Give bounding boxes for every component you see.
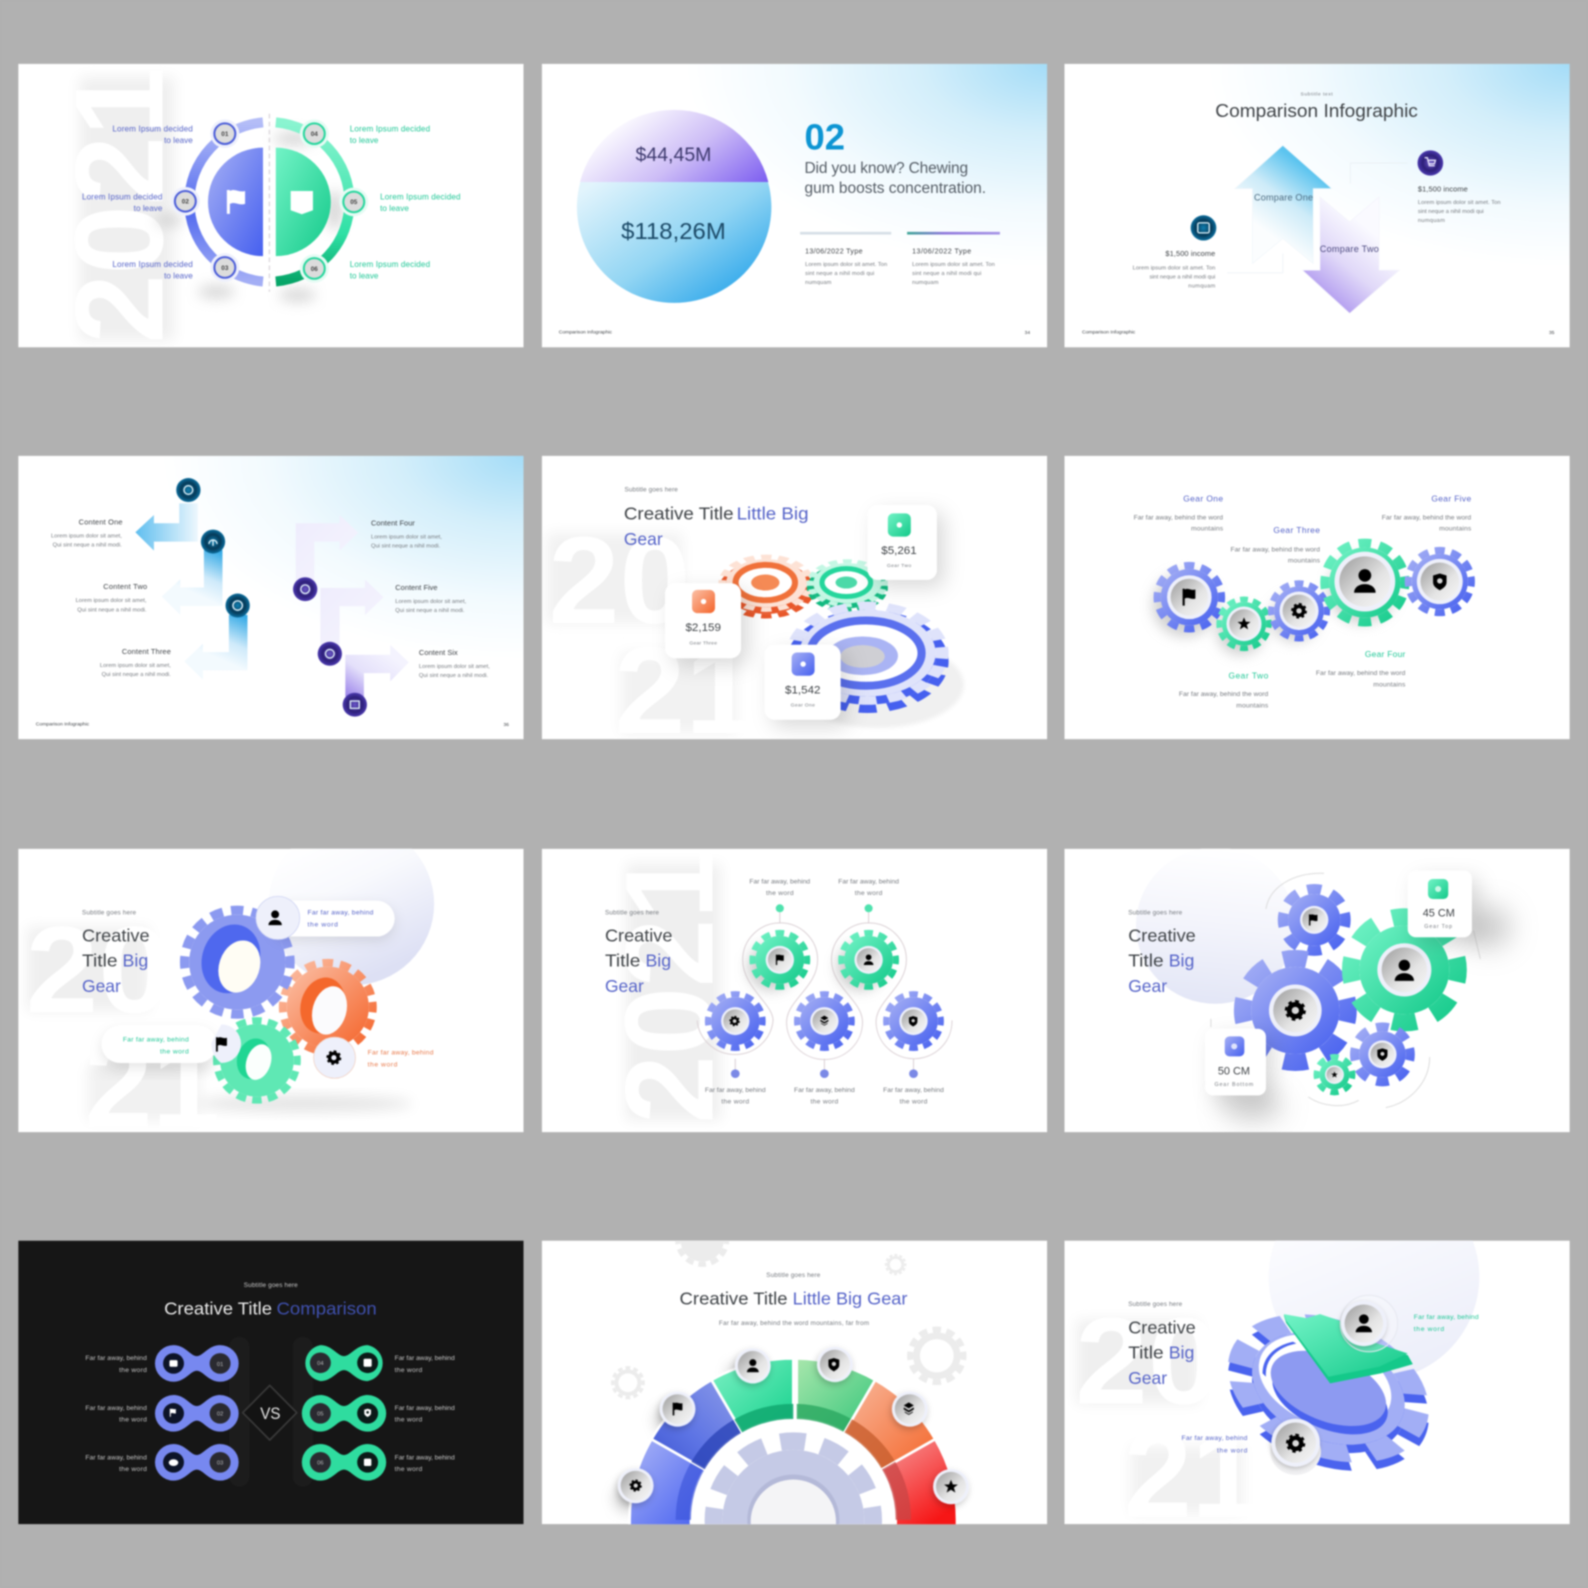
content labels left: Qui sint neque a nihil modi.	[77, 608, 147, 613]
chart: split circle: $44,45M	[636, 144, 711, 166]
gear captions: the word	[766, 890, 794, 897]
callout: blue: the word	[308, 922, 338, 929]
background year numerals: 21	[1124, 1406, 1259, 1543]
callout: green: the word	[160, 1048, 189, 1055]
node labels left: to leave	[134, 204, 163, 213]
detail column right: Lorem ipsum dolor sit amet. Ton	[912, 262, 995, 268]
panel: slide 8 five connected gears	[541, 848, 1048, 1133]
blue chain links: 02	[217, 1412, 223, 1418]
heading: Subtitle goes here	[82, 910, 137, 917]
decorative pale gears	[613, 1216, 964, 1398]
callout text: blue	[1182, 1435, 1248, 1454]
gear labels: Far far away, behind the word	[1134, 514, 1223, 521]
background year numerals: 2021	[601, 851, 739, 1124]
background year numerals	[547, 513, 756, 760]
labels left: the word	[119, 1466, 147, 1473]
card: gear two value: $5,261	[881, 545, 917, 557]
detail column right: 13/06/2022 Type	[912, 249, 971, 256]
gear labels: Gear Four	[1365, 649, 1406, 659]
soft shadows	[156, 132, 343, 302]
gear captions: Far far away, behind	[794, 1087, 855, 1094]
content labels right: Qui sint neque a nihil modi.	[419, 673, 489, 679]
gear: flag	[752, 933, 807, 987]
gear labels: mountains	[1191, 526, 1224, 533]
semicircle segments	[630, 1358, 957, 1588]
text block: income left: sint neque a nihil modi qui	[1149, 275, 1215, 280]
node labels right	[350, 124, 460, 280]
gear captions: the word	[855, 890, 883, 897]
gear: cog	[708, 994, 763, 1048]
heading	[82, 910, 150, 996]
content labels left: Content One	[79, 517, 123, 526]
blue chain links: 03	[217, 1461, 223, 1467]
gear: shield	[886, 994, 941, 1048]
detail column left	[805, 249, 887, 286]
heading: Creative	[82, 926, 150, 946]
node labels right: Lorem Ipsum decided	[350, 124, 430, 133]
footer: Comparison Infographic	[559, 329, 613, 335]
gear one	[1157, 565, 1222, 629]
heading: Gear	[82, 976, 121, 996]
text block: income left: numquam	[1188, 283, 1216, 289]
arrow: content six	[345, 645, 409, 696]
gear: large green user	[1351, 917, 1458, 1023]
panel: slide 6 chain of gears	[1064, 455, 1570, 740]
heading: Gear	[1128, 1368, 1167, 1388]
lavender circle	[1269, 1173, 1479, 1381]
card: gear one value	[765, 645, 841, 720]
callout text: blue: the word	[1217, 1447, 1248, 1454]
panel: slide 3 comparison arrows	[1064, 63, 1570, 348]
footer	[559, 329, 1030, 336]
content labels left: Qui sint neque a nihil modi.	[102, 672, 171, 678]
gear captions: the word	[900, 1099, 928, 1106]
content labels left: Qui sint neque a nihil modi.	[53, 542, 122, 548]
labels right	[395, 1355, 455, 1473]
panel: slide 5 isometric gears	[541, 455, 1048, 760]
heading: Gear	[605, 976, 644, 996]
gear: small blue flag	[1283, 889, 1346, 951]
callout: green: Far far away, behind	[123, 1036, 189, 1043]
center dashed divider	[267, 114, 271, 292]
heading: Subtitle goes here	[625, 487, 678, 494]
heading text: gum boosts concentration.	[804, 180, 986, 197]
arrow: content five	[320, 580, 383, 644]
icon: flag	[227, 190, 245, 214]
content labels right: Lorem ipsum dolor sit amet,	[371, 534, 442, 540]
icon buttons	[618, 1347, 969, 1504]
gear: blue isometric with shadow	[792, 606, 964, 728]
gear labels	[1134, 493, 1472, 710]
text block: income right: $1,500 income	[1418, 185, 1468, 194]
green chain links: 04	[317, 1361, 324, 1367]
panel: slide 11 gear semicircle	[541, 1240, 1048, 1526]
background year numerals: 21	[85, 1017, 220, 1154]
numbered nodes: 05	[350, 199, 358, 206]
heading: Title	[1128, 1343, 1164, 1362]
node labels left	[82, 124, 193, 280]
callout: green	[102, 1024, 241, 1063]
icon button: user	[1340, 1295, 1398, 1352]
footer: 36	[503, 722, 509, 728]
gear: orange	[283, 963, 373, 1052]
segment: red	[882, 1439, 957, 1527]
node labels left: Lorem Ipsum decided	[112, 260, 193, 269]
green chain links: 06	[317, 1461, 324, 1467]
heading	[605, 910, 672, 996]
heading: Far far away, behind the word mountains, far from	[719, 1320, 869, 1327]
detail column right	[912, 249, 995, 286]
gear three	[1271, 583, 1327, 638]
card: 50 cm: Gear Bottom	[1214, 1082, 1254, 1088]
icon: purple cart badge	[1418, 150, 1443, 176]
detail column left: Lorem ipsum dolor sit amet. Ton	[805, 262, 887, 268]
labels right: the word	[395, 1466, 423, 1473]
node labels right: Lorem Ipsum decided	[350, 260, 430, 269]
icon: dark blue badge	[1191, 215, 1216, 241]
gear: blue shield	[1355, 1027, 1410, 1082]
card: 45 cm: Gear Top	[1424, 924, 1452, 930]
heading: Little Big	[737, 503, 809, 523]
soft shadows	[1153, 557, 1396, 655]
footer: Comparison Infographic	[36, 721, 90, 727]
segment: dark blue	[651, 1380, 742, 1469]
arrow: content two	[162, 550, 222, 615]
content labels right: Content Six	[419, 648, 458, 657]
text block: income left	[1133, 249, 1216, 289]
card: 45 cm: 45 CM	[1423, 908, 1455, 920]
text block: income left: $1,500 income	[1165, 249, 1215, 258]
background year numerals	[26, 902, 412, 1154]
gear captions: Far far away, behind	[749, 878, 810, 885]
heading: Comparison	[276, 1299, 377, 1318]
segment: light green	[797, 1358, 875, 1432]
detail column left: numquam	[805, 280, 832, 286]
motion arcs	[1211, 873, 1480, 1108]
card: gear three value: Gear Three	[689, 640, 717, 646]
card: gear three value	[665, 583, 741, 658]
content labels right: Lorem ipsum dolor sit amet,	[395, 599, 467, 605]
panel: slide 1 split circle comparison	[18, 63, 524, 348]
lavender circle	[1136, 847, 1295, 1004]
callout: orange: Far far away, behind	[368, 1049, 434, 1056]
text block: income left: Lorem ipsum dolor sit amet. Ton	[1133, 266, 1215, 271]
gear captions: Far far away, behind	[883, 1087, 944, 1094]
card: gear three value: $2,159	[685, 622, 721, 634]
gear: large blue cog	[1242, 958, 1348, 1063]
card: 50 cm	[1205, 1029, 1266, 1095]
green half disc	[276, 148, 331, 256]
detail column right: sint neque a nihil modi qui	[912, 271, 981, 277]
central gear	[692, 1420, 894, 1588]
labels left: Far far away, behind	[85, 1355, 147, 1362]
content labels left: Content Three	[122, 647, 171, 656]
content labels left: Lorem ipsum dolor sit amet,	[51, 533, 122, 539]
labels left: the word	[119, 1367, 147, 1374]
arrow labels: Compare One	[1254, 192, 1313, 202]
chart: split circle	[577, 110, 771, 303]
gear labels: Gear Two	[1228, 671, 1269, 681]
arrow: content one	[135, 503, 198, 551]
heading: Title	[605, 951, 640, 970]
background year numerals: 21	[614, 623, 756, 760]
content labels right: Qui sint neque a nihil modi.	[395, 608, 465, 614]
card: 50 cm: 50 CM	[1218, 1065, 1250, 1077]
gear: orange isometric	[722, 557, 810, 616]
heading: Gear	[624, 529, 663, 549]
heading: Title	[1128, 951, 1164, 970]
panel: slide 2 pie comparison	[541, 63, 1048, 348]
gear labels: mountains	[1288, 558, 1321, 565]
gear captions: the word	[811, 1099, 838, 1106]
dark side panels	[229, 1337, 313, 1487]
card: gear two value: Gear Two	[887, 563, 911, 569]
content labels right: Qui sint neque a nihil modi.	[371, 543, 441, 549]
footer: Comparison Infographic	[1082, 329, 1136, 335]
panel: slide 9 gear cluster with cards	[1064, 848, 1570, 1133]
soft shadows	[1222, 906, 1511, 1120]
divider bars	[800, 232, 1000, 235]
arrow labels: Compare Two	[1320, 244, 1379, 254]
gear labels: Gear Three	[1273, 525, 1320, 535]
node labels right: to leave	[350, 272, 379, 280]
gear: layers	[797, 994, 852, 1048]
serpentine connector	[697, 923, 952, 1060]
heading: Creative Title	[624, 503, 734, 523]
gear captions: Far far away, behind	[838, 878, 899, 885]
heading text	[804, 160, 986, 197]
gear five	[1408, 550, 1471, 613]
heading	[624, 487, 809, 549]
gear labels: Gear Five	[1431, 493, 1472, 503]
panel: slide 4 bent arrows	[18, 455, 524, 740]
callout text: blue: Far far away, behind	[1182, 1435, 1248, 1442]
labels right: the word	[395, 1416, 423, 1423]
content labels right: Content Four	[371, 519, 415, 528]
background year numerals: 20	[26, 902, 171, 1039]
gear: tiny green star	[1316, 1057, 1352, 1092]
gear: green	[217, 1021, 297, 1100]
gear captions: Far far away, behind	[705, 1087, 766, 1094]
text block: income right: sint neque a nihil modi qui	[1418, 209, 1484, 215]
heading: Big	[1169, 1343, 1194, 1362]
callout: blue: Far far away, behind	[308, 910, 374, 917]
gear four	[1325, 543, 1405, 622]
icon badges	[176, 478, 367, 717]
callout: orange	[314, 1037, 434, 1078]
heading: Subtitle goes here	[1128, 1301, 1183, 1308]
labels right: Far far away, behind	[395, 1355, 455, 1362]
node labels right: to leave	[350, 136, 379, 145]
labels left: Far far away, behind	[85, 1455, 147, 1462]
footer	[36, 721, 509, 728]
lavender circle	[269, 822, 434, 985]
text block: income right: numquam	[1418, 218, 1445, 224]
versus diamond: VS	[260, 1404, 281, 1423]
green chain links	[302, 1345, 386, 1481]
detail column right: numquam	[912, 280, 939, 286]
heading: Big	[123, 951, 148, 970]
green half ring	[276, 122, 349, 281]
heading: Little Big Gear	[793, 1289, 908, 1308]
heading: Subtitle text	[1301, 92, 1333, 98]
icon button: cog	[1270, 1419, 1321, 1475]
node labels left: Lorem Ipsum decided	[112, 124, 193, 133]
blue chain links: 01	[217, 1362, 223, 1368]
blue half disc	[208, 148, 263, 256]
gear wedge: green	[1284, 1314, 1413, 1383]
callout: blue	[256, 896, 395, 940]
card: gear one value: Gear One	[791, 702, 815, 708]
soft shadows	[614, 1363, 751, 1512]
numbered nodes: 01	[221, 131, 229, 138]
heading: Big	[645, 951, 671, 970]
panel: slide 7 three chunky gears	[18, 848, 524, 1154]
heading	[1128, 910, 1196, 996]
numbered nodes: 06	[311, 266, 318, 273]
footer: 35	[1549, 330, 1555, 336]
heading text: Did you know? Chewing	[804, 160, 968, 177]
labels right: the word	[395, 1367, 423, 1374]
arrow: content three	[184, 615, 247, 680]
arrow labels	[1254, 192, 1379, 254]
background year numerals	[1075, 1293, 1259, 1543]
detail column left: sint neque a nihil modi qui	[805, 271, 874, 277]
blue half ring	[189, 122, 263, 281]
gear captions	[705, 878, 944, 1106]
gear: user	[841, 933, 896, 987]
heading: Subtitle goes here	[1128, 910, 1183, 917]
heading: Title	[82, 951, 117, 970]
labels left: Far far away, behind	[85, 1405, 147, 1412]
numbered nodes: 03	[221, 265, 229, 272]
segment: blue	[630, 1439, 705, 1527]
callout text: green: Far far away, behind	[1414, 1314, 1479, 1321]
background year numerals: 2021	[51, 67, 190, 343]
chart: split circle: $118,26M	[621, 218, 726, 244]
callout text: green	[1414, 1314, 1479, 1333]
numbered nodes: 02	[182, 199, 189, 206]
connector lines	[1227, 163, 1408, 273]
heading: Gear	[1128, 976, 1167, 996]
heading: Comparison Infographic	[1215, 100, 1418, 121]
gear labels: mountains	[1236, 703, 1269, 710]
callout text: green: the word	[1414, 1326, 1444, 1333]
background year numerals: 20	[549, 513, 690, 650]
card: gear two value	[868, 505, 937, 580]
gear shadows	[748, 944, 884, 990]
footer: 34	[1025, 330, 1030, 336]
card: 45 cm	[1408, 871, 1472, 937]
node labels left: Lorem Ipsum decided	[82, 193, 162, 202]
heading: Creative	[605, 926, 672, 946]
content labels left: Lorem ipsum dolor sit amet,	[76, 598, 147, 604]
gear labels: Far far away, behind the word	[1382, 514, 1471, 521]
content labels right: Content Five	[395, 583, 438, 592]
arrow: content four	[296, 515, 358, 580]
pin dots	[731, 904, 918, 1078]
labels right: Far far away, behind	[395, 1405, 455, 1412]
heading: Creative	[1128, 926, 1196, 946]
node labels left: to leave	[164, 272, 193, 280]
card: gear one value: $1,542	[785, 685, 821, 697]
heading: Creative	[1128, 1318, 1196, 1337]
heading: Creative Title	[164, 1299, 272, 1318]
callout: orange: the word	[368, 1061, 398, 1068]
gear labels: Gear One	[1183, 493, 1223, 503]
content labels right: Lorem ipsum dolor sit amet,	[419, 664, 490, 670]
node labels left: to leave	[164, 136, 193, 145]
gear two	[1219, 599, 1269, 648]
gear captions: the word	[721, 1099, 749, 1106]
heading	[164, 1282, 377, 1318]
heading: Subtitle goes here	[605, 910, 659, 917]
heading: Subtitle goes here	[766, 1272, 821, 1279]
gear labels: Far far away, behind the word	[1230, 546, 1320, 553]
content labels left: Lorem ipsum dolor sit amet,	[100, 663, 171, 669]
heading: Creative Title	[680, 1289, 788, 1308]
content labels left	[51, 517, 171, 678]
content labels left: Content Two	[103, 582, 147, 591]
footer	[1082, 329, 1555, 336]
blue chain links	[155, 1345, 239, 1481]
background year numerals: 20	[1075, 1293, 1220, 1430]
text block: income right	[1418, 185, 1501, 224]
node labels right: Lorem Ipsum decided	[380, 193, 460, 202]
text block: income right: Lorem ipsum dolor sit amet. Ton	[1418, 200, 1501, 206]
versus diamond	[243, 1385, 297, 1440]
arrow: up compare one	[1235, 145, 1332, 264]
gear: blue	[185, 910, 290, 1014]
number heading: 02	[804, 117, 845, 157]
segment: green	[711, 1358, 793, 1432]
gear labels: Far far away, behind the word	[1316, 670, 1406, 677]
gear: blue isometric	[1220, 1299, 1437, 1486]
detail column left: 13/06/2022 Type	[805, 249, 863, 256]
segment: orange	[844, 1380, 935, 1469]
green chain links: 05	[317, 1412, 324, 1418]
arrow: down compare two	[1302, 197, 1399, 313]
heading	[680, 1272, 908, 1327]
gear labels: mountains	[1373, 682, 1406, 689]
gear labels: mountains	[1439, 526, 1472, 533]
heading: Big	[1169, 951, 1194, 970]
heading	[1128, 1301, 1196, 1388]
gear: green isometric	[810, 561, 885, 610]
node labels right: to leave	[380, 204, 409, 213]
heading: Subtitle goes here	[244, 1282, 298, 1289]
panel: slide 12 isometric gear	[1064, 1240, 1570, 1543]
labels left	[85, 1355, 147, 1473]
numbered nodes	[171, 119, 368, 283]
panel: slide 10 dark versus comparison	[17, 1240, 524, 1526]
labels left: the word	[119, 1416, 147, 1423]
gear labels: Far far away, behind the word	[1179, 691, 1269, 698]
labels right: Far far away, behind	[395, 1455, 455, 1462]
content labels right	[371, 519, 490, 679]
icon: shield	[291, 191, 313, 214]
numbered nodes: 04	[311, 131, 318, 138]
